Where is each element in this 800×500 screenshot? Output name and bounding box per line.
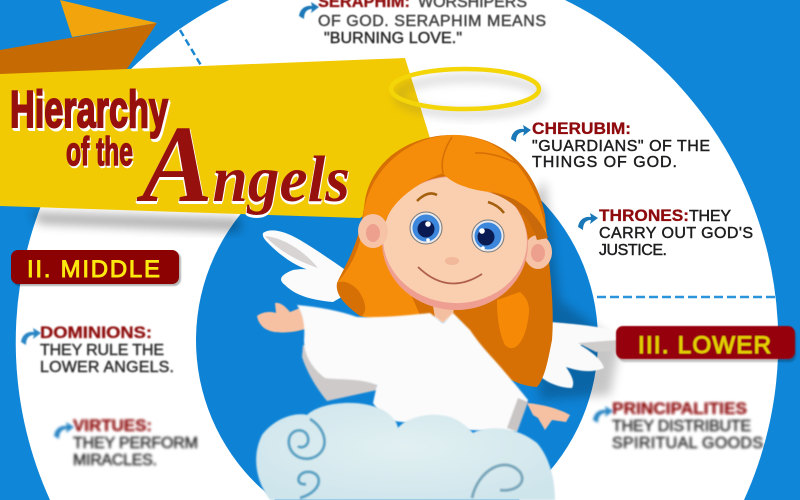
angel character (256, 135, 620, 500)
icon: arrow (578, 213, 598, 230)
dashed divider: upper left (180, 30, 202, 67)
cherubim text: THINGS OF GOD. (532, 154, 677, 171)
angel shadow on the ring (530, 180, 620, 400)
dominions text: DOMINIONS: (40, 324, 152, 342)
face (358, 135, 548, 316)
wing: left (263, 230, 350, 302)
virtues text: VIRTUES: (73, 417, 152, 435)
virtues text (54, 417, 198, 469)
title banner (0, 58, 440, 225)
hair: bright strands (337, 225, 529, 348)
thrones text (578, 207, 753, 259)
hair: back (337, 135, 553, 387)
cherubim text: CHERUBIM: (532, 120, 631, 138)
dominions text: LOWER ANGELS. (40, 359, 174, 376)
badge: II. Middle (11, 250, 181, 286)
icon: arrow (299, 2, 319, 19)
dashed divider: right (597, 296, 776, 298)
title: of the: of the (66, 130, 133, 174)
cloud (256, 403, 555, 500)
icon: arrow (54, 422, 74, 439)
seraphim text: OF GOD. SERAPHIM MEANS (318, 13, 546, 30)
principalities text: SPIRITUAL GOODS (612, 435, 763, 452)
cherubim text: "GUARDIANS" OF THE (532, 138, 710, 155)
icon: arrow (21, 328, 41, 345)
thrones text: CARRY OUT GOD'S (599, 225, 753, 242)
eye: left (410, 212, 442, 244)
principalities text: PRINCIPALITIES (612, 400, 747, 418)
halo (391, 69, 542, 114)
hand: right (527, 403, 570, 430)
thrones text: THRONES: (599, 207, 689, 225)
icon: arrow (511, 125, 531, 142)
badge: II. Middle: II. MIDDLE (27, 256, 160, 283)
title: Angels: Angels (136, 103, 350, 225)
inner blue circle (196, 139, 598, 500)
eye: right (472, 220, 504, 252)
cloud swirls (289, 419, 522, 498)
principalities text (593, 400, 763, 452)
badge: III. Lower (616, 326, 796, 362)
badge: III. Lower: III. LOWER (638, 332, 771, 359)
neck (432, 300, 455, 323)
wing: right (532, 322, 618, 388)
seraphim text (299, 0, 546, 47)
dominions text (21, 324, 174, 376)
nose (445, 257, 459, 265)
robe (297, 305, 528, 432)
icon: arrow (593, 406, 613, 423)
thrones text: THEY (689, 208, 731, 225)
hair: bangs (363, 135, 547, 235)
hand: left (257, 303, 308, 332)
virtues text: MIRACLES. (73, 452, 157, 469)
ear: left (358, 214, 388, 248)
hair: parting line (442, 137, 520, 173)
ribbon fold (0, 0, 157, 75)
thrones text: JUSTICE. (599, 242, 667, 259)
eyebrows (417, 193, 504, 213)
dominions text: THEY RULE THE (40, 342, 164, 359)
principalities text: THEY DISTRIBUTE (612, 418, 751, 435)
virtues text: THEY PERFORM (73, 435, 198, 452)
banner shadow (30, 212, 240, 232)
title: Hierarchy: Hierarchy (10, 81, 168, 139)
ear: right (524, 235, 552, 269)
hair: shaded fringe (488, 192, 548, 240)
cherubim text (511, 120, 710, 171)
seraphim text: "BURNING LOVE." (324, 30, 462, 47)
smile (418, 267, 482, 283)
